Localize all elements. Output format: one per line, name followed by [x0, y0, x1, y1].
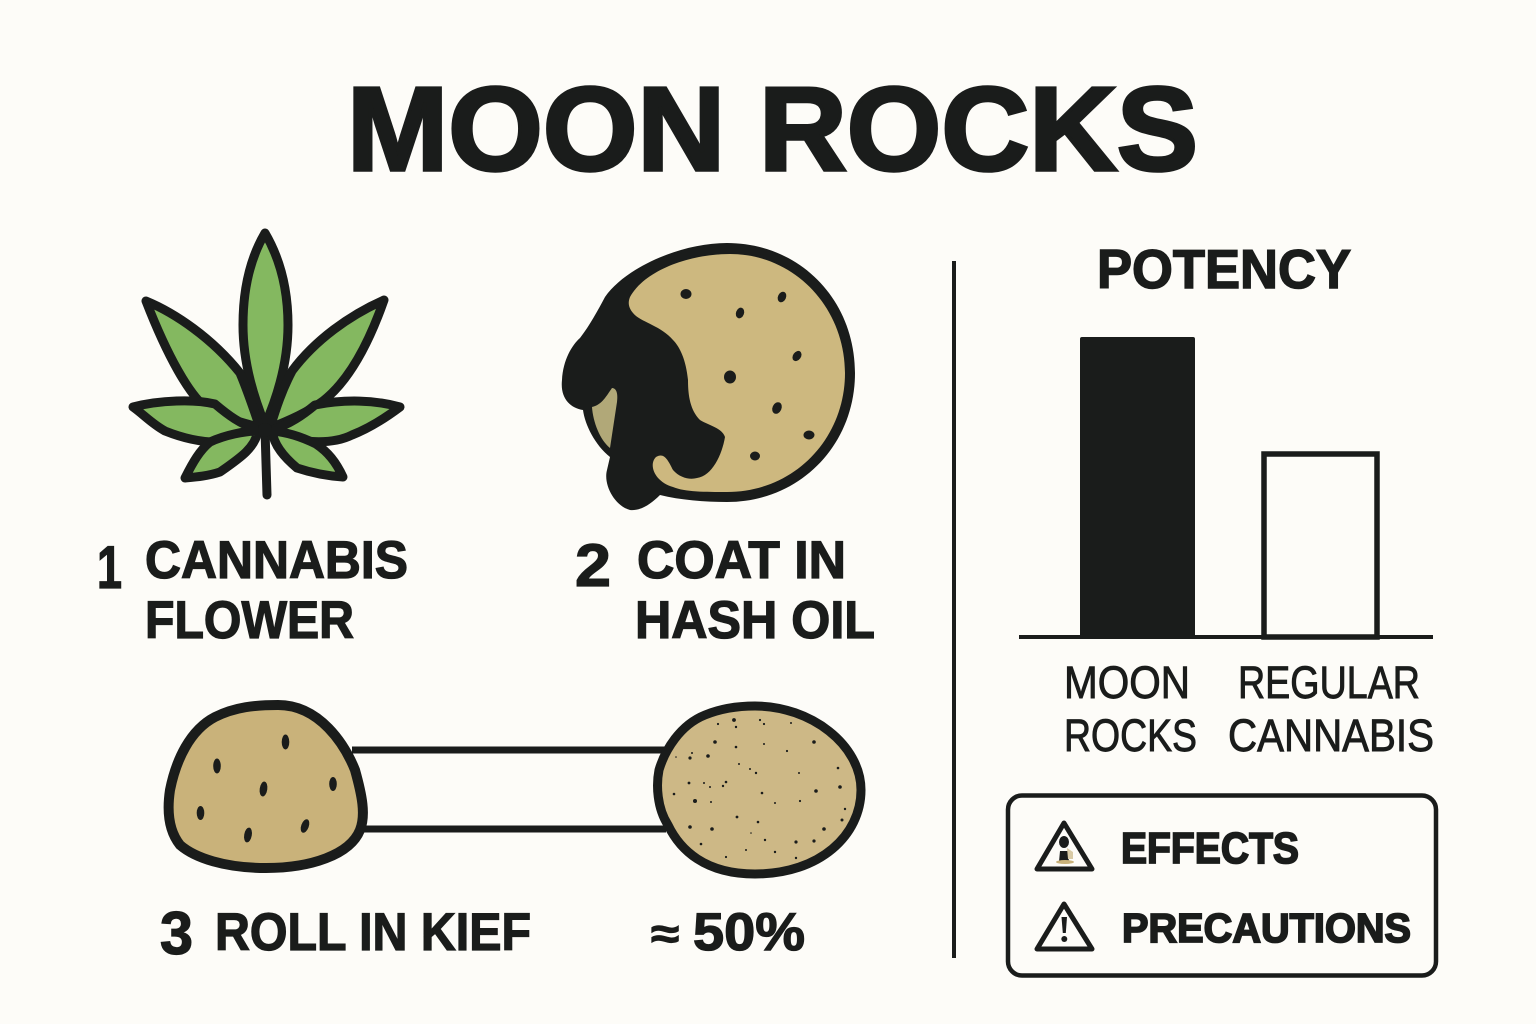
- label: step 1: CANNABIS: [145, 531, 408, 590]
- label: step 1: FLOWER: [145, 591, 354, 650]
- label: step 3: 3: [160, 900, 193, 967]
- icon: kief-rolled bud: [658, 706, 861, 874]
- label: step 2: COAT IN: [637, 531, 846, 590]
- icon: effects warning triangle: [1037, 823, 1092, 869]
- label: step 1: [97, 531, 408, 650]
- heading: potency: POTENCY: [1097, 238, 1351, 300]
- axis label: moon rocks: ROCKS: [1064, 710, 1197, 761]
- title: MOON ROCKS: [347, 63, 1198, 196]
- label: approximately 50%: [651, 903, 805, 962]
- vertical divider: [952, 261, 956, 958]
- icon: oiled bud: [169, 705, 363, 868]
- label: step 2: HASH OIL: [635, 591, 875, 650]
- panel: effects and precautions: [1008, 796, 1436, 976]
- text: precautions: PRECAUTIONS: [1122, 905, 1411, 951]
- icon: precautions warning triangle: [1037, 904, 1092, 949]
- icon: cannabis leaf: [133, 233, 400, 495]
- axis label: regular cannabis: CANNABIS: [1228, 710, 1434, 761]
- bar: moon rocks: [1080, 337, 1195, 637]
- axis label: moon rocks: [1064, 657, 1197, 761]
- label: step 1: 1: [97, 534, 122, 601]
- axis label: regular cannabis: [1228, 657, 1434, 761]
- axis label: regular cannabis: REGULAR: [1238, 657, 1420, 708]
- icon: bud coated in hash oil: [562, 243, 855, 510]
- axis line: [1019, 635, 1433, 639]
- text: effects: EFFECTS: [1121, 824, 1299, 873]
- label: step 3: [160, 900, 531, 967]
- bar: regular cannabis: [1264, 454, 1377, 637]
- label: approximately 50%: ≈: [651, 910, 679, 957]
- bar chart: potency: [1019, 337, 1434, 761]
- axis label: moon rocks: MOON: [1064, 657, 1190, 708]
- icon: connecting tube between buds: [352, 746, 666, 832]
- label: step 2: 2: [575, 532, 611, 599]
- label: step 2: [575, 531, 875, 650]
- label: approximately 50%: 50%: [693, 903, 805, 962]
- label: step 3: ROLL IN KIEF: [215, 903, 531, 962]
